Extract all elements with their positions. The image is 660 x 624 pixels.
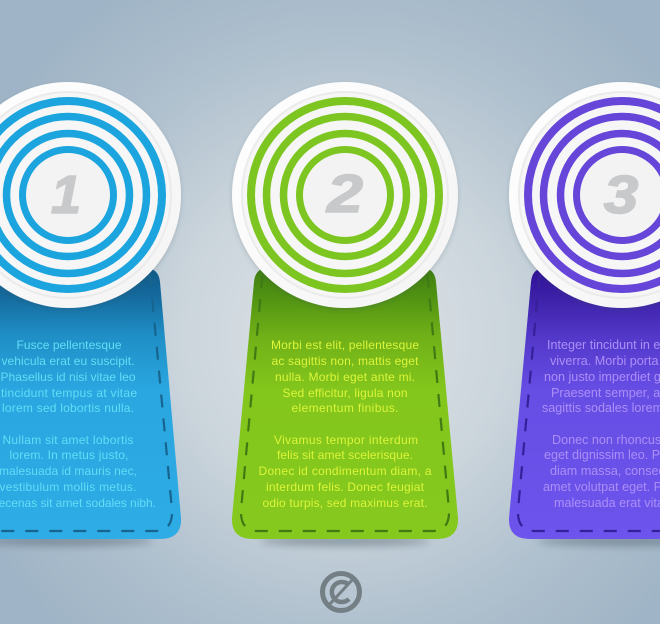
- blue panel text: lorem sed lobortis nulla.: [2, 401, 134, 415]
- icon: public domain mark: [322, 574, 360, 610]
- green panel text: felis sit amet scelerisque.: [277, 448, 413, 462]
- blue panel text: Phasellus id nisi vitae leo: [0, 370, 136, 384]
- purple panel text: [542, 338, 660, 510]
- number 2: 2: [326, 163, 363, 224]
- green panel text: nulla. Morbi eget ante mi.: [275, 370, 415, 384]
- blue panel text: malesuada id mauris nec,: [0, 464, 137, 478]
- green panel text: Donec id condimentum diam, a: [258, 464, 432, 478]
- purple panel stitching: [518, 275, 660, 531]
- green panel text: Vivamus tempor interdum: [274, 433, 418, 447]
- green panel text: ac sagittis non, mattis eget: [272, 354, 419, 368]
- blue panel text: vestibulum mollis metus.: [0, 480, 136, 494]
- column 1: blue: [0, 82, 181, 546]
- green target disc: [232, 82, 458, 308]
- green panel stitching: [241, 275, 449, 531]
- number 1: 1: [51, 165, 81, 225]
- blue panel: [0, 268, 181, 539]
- green panel shadow: [260, 536, 430, 546]
- green panel: [232, 268, 458, 539]
- blue panel text: vehicula erat eu suscipit.: [2, 354, 134, 368]
- column 3: purple: [509, 82, 660, 546]
- purple panel shadow: [537, 536, 660, 546]
- blue panel text: tincidunt tempus at vitae: [1, 386, 137, 400]
- green panel text: elementum finibus.: [292, 401, 398, 415]
- column 2: green: [232, 82, 458, 546]
- blue target disc: [0, 82, 181, 308]
- green panel text: Morbi est elit, pellentesque: [271, 338, 419, 352]
- blue panel text: Nullam sit amet lobortis: [2, 433, 134, 447]
- blue panel text: lorem. In metus justo,: [10, 448, 128, 462]
- purple panel: [509, 268, 660, 539]
- green panel text: [258, 338, 432, 510]
- green panel text: interdum felis. Donec feugiat: [266, 480, 425, 494]
- green panel text: Sed efficitur, ligula non: [282, 386, 408, 400]
- blue panel text: Fusce pellentesque: [16, 338, 122, 352]
- blue panel text: [0, 338, 156, 510]
- blue panel stitching: [0, 275, 172, 531]
- blue panel shadow: [0, 536, 153, 546]
- green panel text: odio turpis, sed maximus erat.: [262, 496, 428, 510]
- number 3: 3: [604, 165, 638, 225]
- purple panel text: Donec non rhoncus: [552, 433, 660, 447]
- purple target disc: [509, 82, 660, 308]
